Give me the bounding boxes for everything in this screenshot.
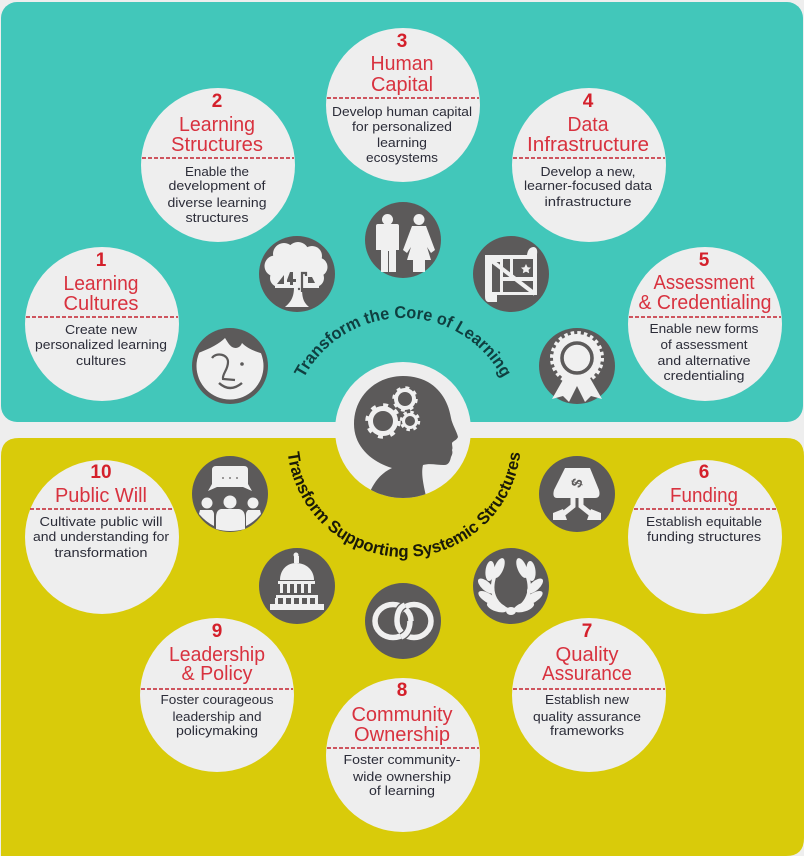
item 9: Leadership & Policy: Foster courageous xyxy=(160,692,274,707)
item 2: Learning Structures: Learning xyxy=(179,114,255,136)
item 1: Learning Cultures: Learning xyxy=(64,273,138,295)
icon: award ribbon xyxy=(539,328,615,404)
item 2: Learning Structures: structures xyxy=(186,210,249,225)
item 1: Learning Cultures xyxy=(25,247,179,401)
item 5: Assessment & Credentialing xyxy=(628,247,782,401)
item 9: Leadership & Policy: & Policy xyxy=(182,663,252,685)
item 8: Community Ownership: 8 xyxy=(397,680,407,701)
item 8: Community Ownership: Community xyxy=(352,704,452,726)
item 9: Leadership & Policy: Leadership xyxy=(169,644,265,666)
item 1: Learning Cultures: Cultures xyxy=(64,293,138,315)
item 3: Human Capital: 3 xyxy=(397,31,407,52)
item 3: Human Capital: ecosystems xyxy=(366,150,439,165)
panel: transform supporting systemic structures (yellow) xyxy=(1,438,804,856)
item 1: Learning Cultures: Create new xyxy=(65,322,138,337)
item 5: Assessment & Credentialing: Enable new forms xyxy=(650,321,759,336)
item 10: Public Will: Cultivate public will xyxy=(40,514,163,529)
item 7: Quality Assurance: frameworks xyxy=(550,723,625,738)
item 4: Data Infrastructure: Infrastructure xyxy=(527,134,649,156)
item 4: Data Infrastructure: Data xyxy=(568,114,609,136)
item 3: Human Capital: Human xyxy=(370,53,434,75)
item 10: Public Will: 10 xyxy=(90,462,112,483)
item 4: Data Infrastructure: 4 xyxy=(583,91,594,112)
item 3: Human Capital: learning xyxy=(377,135,427,150)
item 10: Public Will: and understanding for xyxy=(33,529,170,544)
item 10: Public Will xyxy=(25,460,179,614)
item 5: Assessment & Credentialing: of assessment xyxy=(660,337,748,352)
icon: man and woman xyxy=(365,202,441,278)
item 1: Learning Cultures: personalized learning xyxy=(35,337,167,352)
icon: linked rings xyxy=(365,583,441,659)
item 7: Quality Assurance: Quality xyxy=(556,644,618,666)
icon: tree xyxy=(259,236,335,312)
item 3: Human Capital: Capital xyxy=(371,74,433,96)
item 9: Leadership & Policy: policymaking xyxy=(176,723,258,738)
item 2: Learning Structures: Structures xyxy=(171,134,263,156)
item 9: Leadership & Policy xyxy=(140,618,294,772)
item 8: Community Ownership: of learning xyxy=(369,783,435,798)
item 5: Assessment & Credentialing: and alternative xyxy=(658,353,750,368)
item 9: Leadership & Policy: 9 xyxy=(212,621,222,642)
item 9: Leadership & Policy: leadership and xyxy=(172,709,262,724)
item 7: Quality Assurance xyxy=(512,618,666,772)
item 5: Assessment & Credentialing: & Credentialing xyxy=(638,292,772,314)
item 4: Data Infrastructure: infrastructure xyxy=(544,194,632,209)
item 4: Data Infrastructure xyxy=(512,88,666,242)
item 4: Data Infrastructure: Develop a new, xyxy=(540,164,636,179)
item 3: Human Capital: Develop human capital xyxy=(332,104,472,119)
item 6: Funding: Funding xyxy=(670,485,738,507)
item 6: Funding: 6 xyxy=(699,462,709,483)
item 1: Learning Cultures: cultures xyxy=(76,353,127,368)
heading: Transform the Core of Learning: Transform the Core of Learning xyxy=(294,306,510,378)
item 2: Learning Structures: 2 xyxy=(212,91,222,112)
item 10: Public Will: transformation xyxy=(54,545,148,560)
icon: speech bubble and group xyxy=(192,456,268,532)
item 7: Quality Assurance: Establish new xyxy=(545,692,630,707)
item 3: Human Capital: for personalized xyxy=(352,119,452,134)
item 2: Learning Structures xyxy=(141,88,295,242)
item 8: Community Ownership xyxy=(326,678,480,832)
item 2: Learning Structures: development of xyxy=(168,178,266,193)
icon: funding lamp with dollar: $ xyxy=(568,476,587,490)
icon: face xyxy=(190,328,270,404)
icon: capitol building xyxy=(259,548,335,624)
item 8: Community Ownership: Foster community- xyxy=(344,752,460,767)
item 10: Public Will: Public Will xyxy=(55,485,147,507)
item 3: Human Capital xyxy=(326,28,480,182)
item 7: Quality Assurance: 7 xyxy=(582,621,592,642)
item 7: Quality Assurance: Assurance xyxy=(542,663,632,685)
icon: map xyxy=(473,236,549,312)
item 8: Community Ownership: wide ownership xyxy=(352,769,451,784)
heading: Transform Supporting Systemic Structures: Transform Supporting Systemic Structures xyxy=(288,451,520,561)
item 5: Assessment & Credentialing: credentialing xyxy=(664,368,744,383)
icon: laurel wreath xyxy=(473,548,549,624)
icon: funding lamp with dollar xyxy=(539,456,615,532)
item 1: Learning Cultures: 1 xyxy=(96,250,107,271)
item 5: Assessment & Credentialing: Assessment xyxy=(654,272,755,294)
item 6: Funding: Establish equitable xyxy=(646,514,762,529)
item 2: Learning Structures: Enable the xyxy=(185,164,249,179)
panel: transform the core of learning (teal) xyxy=(1,2,803,422)
item 6: Funding xyxy=(628,460,782,614)
item 6: Funding: funding structures xyxy=(647,529,762,544)
item 4: Data Infrastructure: learner-focused data xyxy=(524,178,653,193)
icon: central head with gears xyxy=(335,362,471,500)
item 7: Quality Assurance: quality assurance xyxy=(533,709,641,724)
item 8: Community Ownership: Ownership xyxy=(354,724,450,746)
item 5: Assessment & Credentialing: 5 xyxy=(699,250,710,271)
item 2: Learning Structures: diverse learning xyxy=(168,195,266,210)
